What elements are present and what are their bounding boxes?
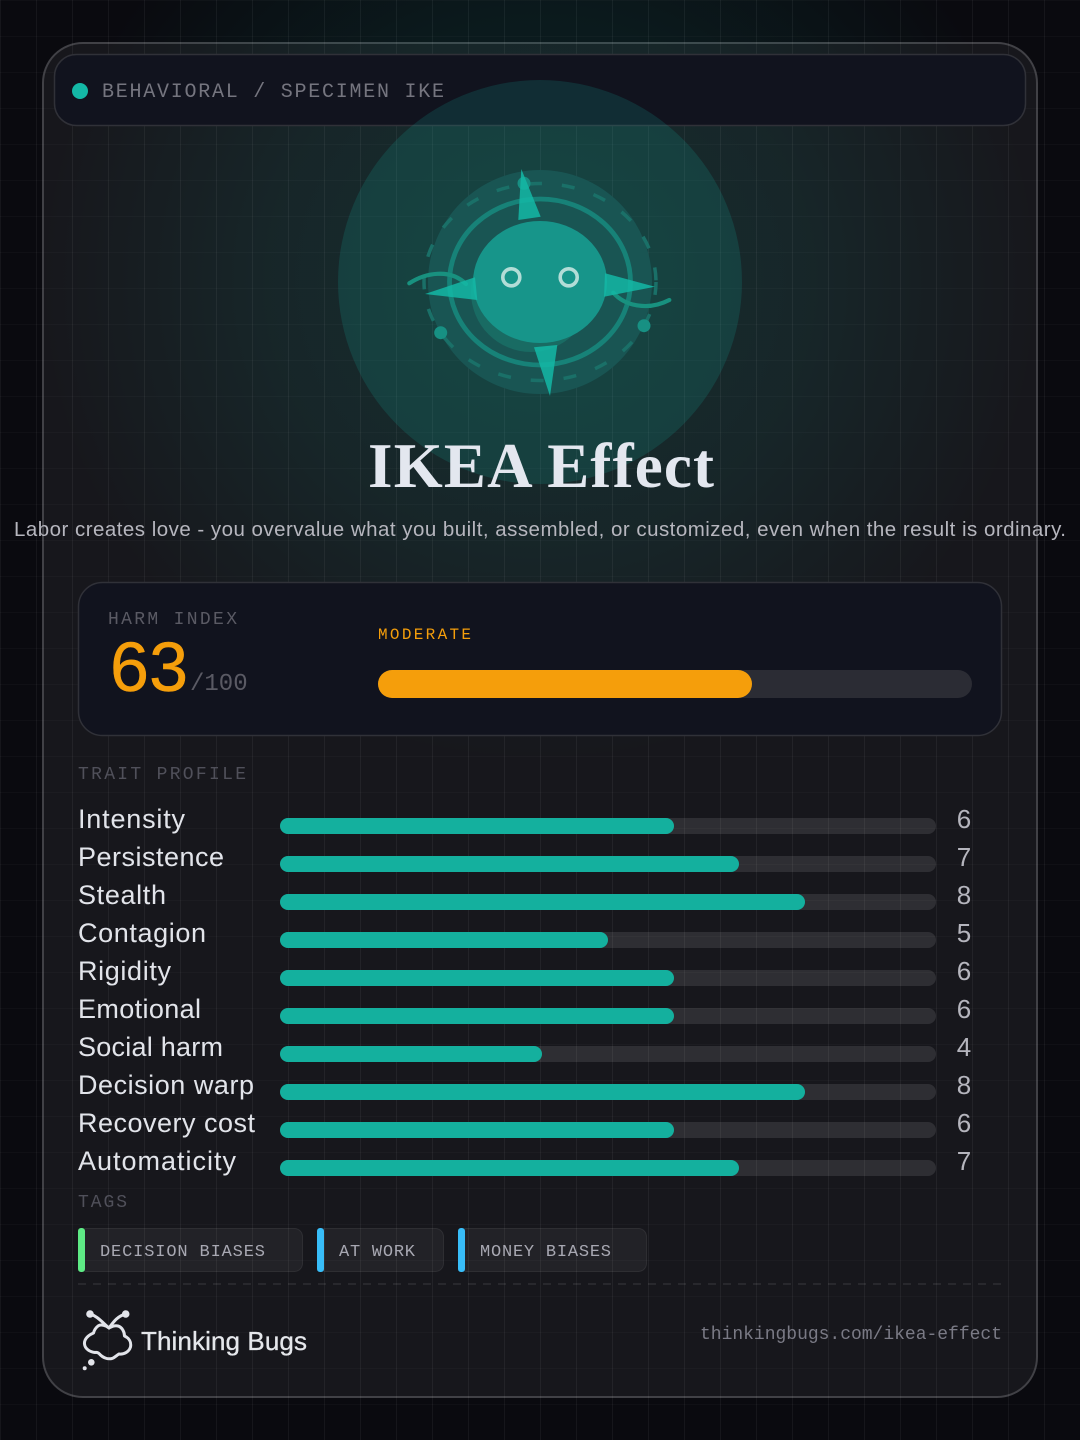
eye left	[503, 269, 520, 286]
trait: Decision warp: Decision warp	[78, 1070, 254, 1100]
severity label: MODERATE	[378, 626, 471, 644]
trait: Recovery cost	[78, 1108, 971, 1138]
body	[473, 221, 607, 343]
trait: Emotional: 6	[957, 994, 971, 1024]
header bar	[54, 54, 1026, 126]
trait: Rigidity: Rigidity	[78, 956, 172, 986]
trait: Rigidity	[78, 956, 971, 986]
body shadow	[471, 232, 591, 352]
tag: decision biases: DECISION BIASES	[100, 1243, 265, 1262]
trait: Emotional: Emotional	[78, 994, 201, 1024]
tag: money biases	[458, 1228, 646, 1272]
source url: thinkingbugs.com/ikea-effect	[700, 1325, 1002, 1345]
chart: trait profile bars	[78, 804, 971, 1176]
icon backing disc	[428, 170, 652, 394]
trait: Decision warp	[78, 1070, 971, 1100]
dot right	[638, 319, 650, 332]
inner ring	[450, 199, 630, 365]
trait profile heading: TRAIT PROFILE	[78, 765, 246, 785]
spike bottom	[534, 345, 557, 396]
harm score: 63	[110, 628, 188, 706]
trait: Persistence: 7	[957, 842, 971, 872]
harm meter	[378, 670, 972, 698]
top node	[518, 177, 530, 190]
trait: Social harm: 4	[957, 1032, 971, 1062]
trait: Stealth: 8	[957, 880, 971, 910]
trait: Automaticity: 7	[957, 1146, 971, 1176]
icon: Thinking Bugs logo	[83, 1310, 131, 1370]
icon: bug mascot	[409, 169, 669, 396]
dashed orbit	[424, 184, 656, 380]
harm index label: HARM INDEX	[108, 610, 237, 630]
trait: Recovery cost: Recovery cost	[78, 1108, 255, 1138]
tag: money biases: MONEY BIASES	[480, 1243, 611, 1262]
trait: Contagion: Contagion	[78, 918, 206, 948]
trait: Persistence	[78, 842, 971, 872]
wave right	[613, 293, 669, 306]
trait: Rigidity: 6	[957, 956, 971, 986]
trait: Contagion	[78, 918, 971, 948]
brand name: Thinking Bugs	[141, 1326, 307, 1356]
spike right	[604, 273, 655, 297]
trait: Decision warp: 8	[957, 1070, 971, 1100]
trait: Social harm	[78, 1032, 971, 1062]
trait: Stealth	[78, 880, 971, 910]
tag: decision biases	[78, 1228, 302, 1272]
tags heading: TAGS	[78, 1193, 127, 1213]
trait: Recovery cost: 6	[957, 1108, 971, 1138]
trait: Intensity: Intensity	[78, 804, 186, 834]
trait: Stealth: Stealth	[78, 880, 166, 910]
spike top	[518, 169, 541, 220]
trait: Automaticity	[78, 1146, 971, 1176]
eye right	[560, 269, 577, 286]
trait: Emotional	[78, 994, 971, 1024]
dot left	[434, 326, 447, 339]
trait: Intensity: 6	[957, 804, 971, 834]
trait: Persistence: Persistence	[78, 842, 224, 872]
tag: at work: AT WORK	[339, 1243, 416, 1262]
score denominator: /100	[190, 671, 248, 698]
title: IKEA Effect	[368, 431, 714, 501]
halo circle	[338, 80, 742, 484]
panel: harm index	[78, 582, 1002, 736]
tag: at work	[317, 1228, 444, 1272]
specimen label: BEHAVIORAL / SPECIMEN IKE	[102, 81, 444, 104]
status dot	[72, 83, 88, 99]
trait: Intensity	[78, 804, 971, 834]
wave left	[409, 274, 466, 284]
trait: Contagion: 5	[957, 918, 971, 948]
trait: Automaticity: Automaticity	[78, 1146, 236, 1176]
spike left	[425, 277, 477, 300]
subtitle: Labor creates love - you overvalue what you built, assembled, or customized, even when the result is ordinary.	[14, 518, 1066, 541]
trait: Social harm: Social harm	[78, 1032, 223, 1062]
tag list	[78, 1228, 646, 1272]
